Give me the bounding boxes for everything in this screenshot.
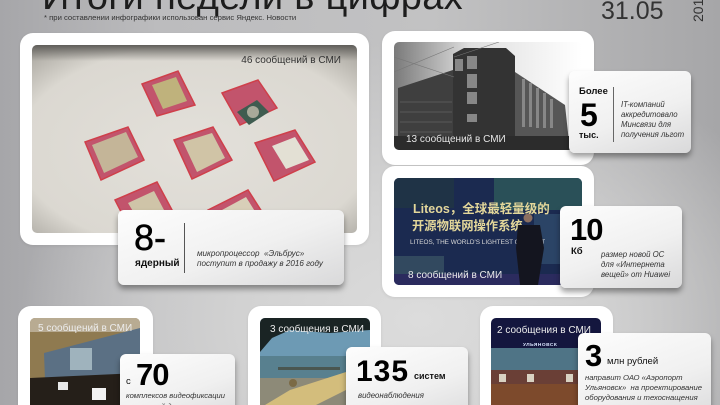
unit: систем: [414, 371, 446, 381]
media count: 8 сообщений в СМИ: [408, 269, 502, 281]
unit: тыс.: [579, 130, 599, 140]
card: 3 million: [578, 333, 711, 405]
description: IT-компаний: [621, 100, 665, 109]
description: [621, 100, 684, 139]
media count: 5 сообщений в СМИ: [38, 322, 132, 334]
photo: control room: [30, 318, 140, 405]
media count: 13 сообщений в СМИ: [406, 133, 506, 145]
description: поступит в продажу в 2016 году: [197, 259, 323, 268]
description: комплексов видеофиксации: [126, 391, 225, 400]
description: [600, 250, 670, 279]
source note: * при составлении инфографики использован сервис Яндекс. Новости: [44, 13, 296, 22]
number: 135: [356, 355, 409, 388]
description: Ульяновск» на проектирование: [585, 383, 702, 392]
number: 8-: [134, 217, 166, 258]
description: вещей» от Huawei: [601, 270, 670, 279]
photo: embankment: [260, 318, 370, 405]
card: 70 complexes: [120, 354, 235, 405]
media count: 3 сообщения в СМИ: [270, 323, 364, 335]
media count: 2 сообщения в СМИ: [497, 324, 591, 336]
photo: building: [394, 42, 570, 150]
description: [126, 391, 225, 405]
description: [585, 373, 702, 402]
panel: accreditation: [382, 31, 594, 165]
panel: airport: [480, 306, 613, 405]
unit: Кб: [571, 246, 583, 257]
chips: [85, 71, 315, 233]
slide text: Liteos，全球最轻量级的: [413, 201, 550, 216]
description: для «Интернета: [601, 260, 665, 269]
description: Минсвязи для: [621, 120, 671, 129]
description: аккредитовало: [621, 110, 678, 119]
description: видеонаблюдения: [358, 391, 424, 400]
divider: [613, 87, 614, 142]
speaker: [516, 214, 544, 285]
divider: [184, 223, 185, 273]
description: направит ОАО «Аэропорт: [585, 373, 683, 382]
unit: ядерный: [135, 258, 180, 269]
photo: LiteOS stage: LITEOS, THE WORLD'S LIGHTEST OPEN IOT: [410, 239, 545, 246]
number: 70: [136, 357, 168, 392]
panel: Huawei: [382, 166, 594, 297]
unit: млн рублей: [607, 356, 658, 367]
photo: Ulyanovsk airport: [491, 318, 601, 405]
photo: processors: [32, 45, 357, 233]
panel: traffic cameras: [18, 306, 153, 405]
description: получения льгот: [621, 130, 684, 139]
number: 10: [570, 212, 602, 247]
sign: УЛЬЯНОВСК: [523, 342, 557, 348]
description: оборудования и техоснащения: [585, 393, 698, 402]
prefix: Более: [579, 86, 608, 97]
card: 10 KB: [560, 206, 682, 288]
description: микропроцессор «Эльбрус»: [197, 249, 304, 258]
photo: LiteOS stage: [394, 178, 582, 285]
card: 8-core: [118, 210, 344, 285]
number: 3: [585, 338, 602, 373]
description: размер новой ОС: [601, 250, 664, 259]
card: 5 thousand: [569, 71, 691, 153]
panel: video surveillance: [248, 306, 381, 405]
panel: processors: [20, 33, 369, 245]
description: [197, 249, 324, 268]
number: 5: [580, 97, 598, 133]
prefix: с: [126, 376, 131, 387]
media count: 46 сообщений в СМИ: [241, 54, 341, 66]
card: 135 systems: [346, 347, 468, 405]
photo: LiteOS stage: 开源物联网操作系统: [412, 218, 523, 233]
